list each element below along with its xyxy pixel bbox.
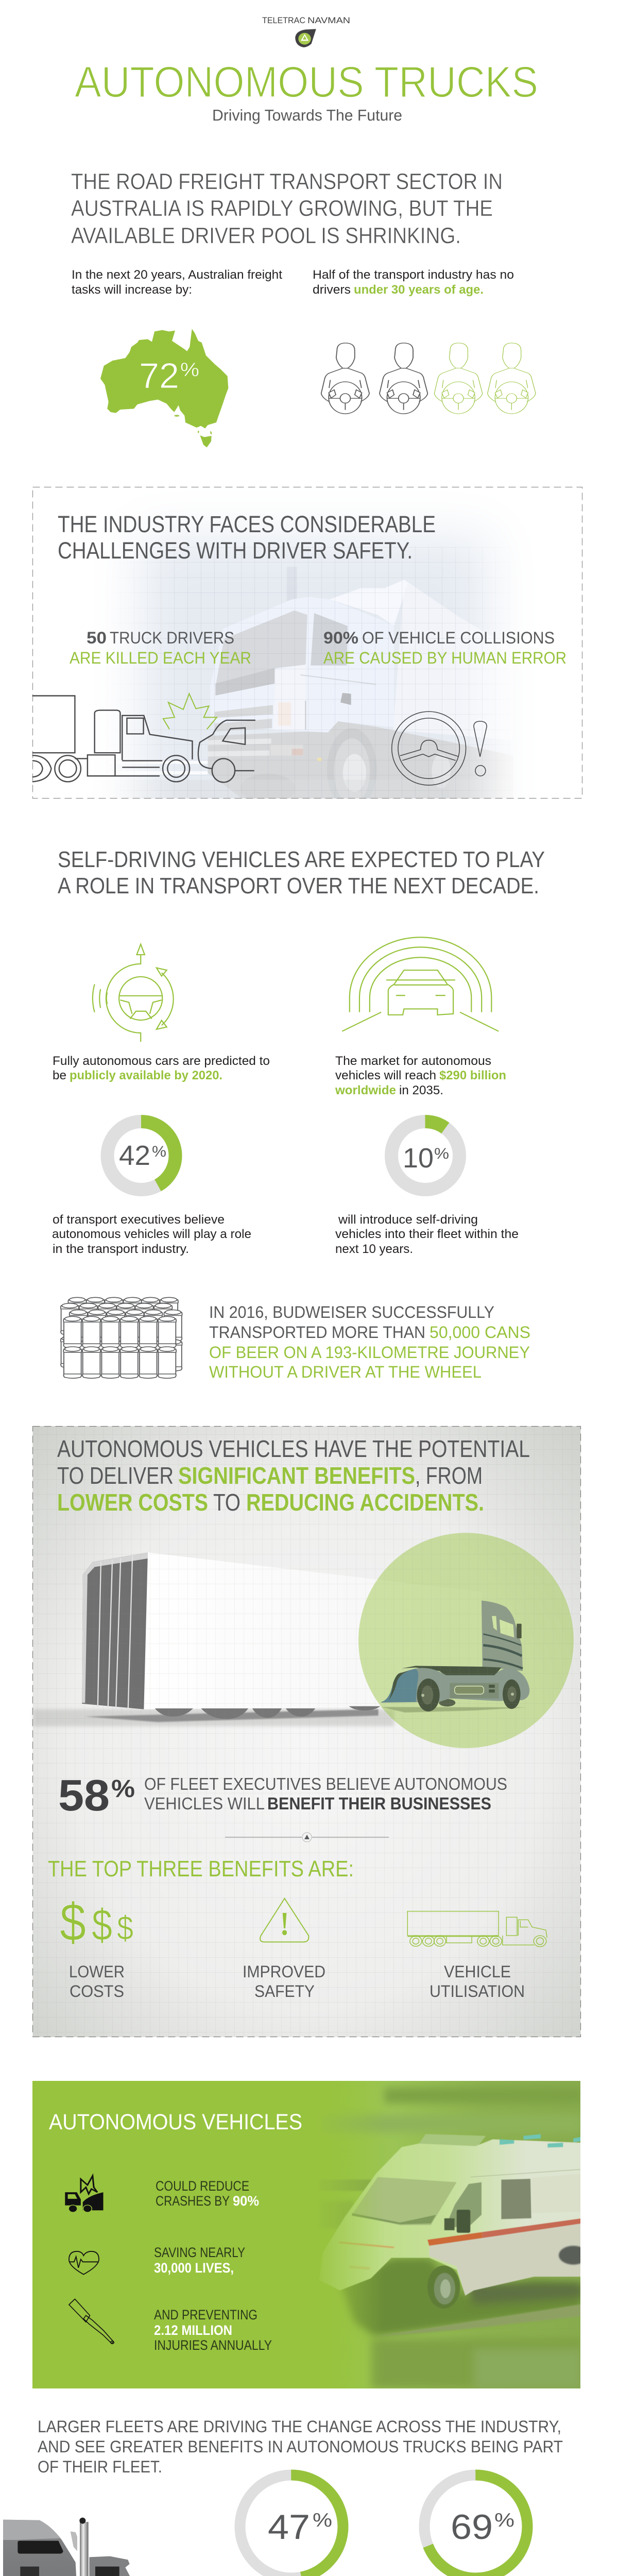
text: 10% description: will introduce self-driving [338, 1213, 478, 1227]
text: publicly available by 2020: publicly available by 2020. [70, 1069, 222, 1082]
text: publicly available by 2020: be [53, 1069, 66, 1082]
donut chart: 42% [107, 1122, 175, 1190]
heading: road freight sector: AVAILABLE DRIVER POOL IS SHRINKING. [71, 223, 461, 248]
heading: TO DELIVER [57, 1462, 174, 1489]
panel background [33, 1426, 581, 2037]
heading: , FROM [415, 1462, 483, 1489]
text: Budweiser callout: 50,000 CANS [430, 1323, 530, 1342]
text: $290 billion market [335, 1054, 506, 1097]
text: freight task growth [72, 268, 282, 297]
icon: dollar signs: $ [117, 1909, 133, 1947]
label: improved safety: IMPROVED [243, 1962, 325, 1981]
heading: AUTONOMOUS VEHICLES HAVE THE POTENTIAL [57, 1435, 530, 1462]
heading: larger fleets: LARGER FLEETS ARE DRIVING THE CHANGE ACROSS THE INDUSTRY, [38, 2417, 561, 2436]
stat: 58% of fleet executives [58, 1771, 507, 1820]
truck cab [381, 1601, 529, 1713]
subtitle: Driving Towards The Future [212, 106, 402, 124]
icon: truck outline [407, 1911, 547, 1947]
heading: THE INDUSTRY FACES CONSIDERABLE [58, 511, 436, 537]
icon: crash [65, 2176, 104, 2212]
donut chart: 10%: 10 [403, 1143, 434, 1174]
icon: dollar signs: $ [60, 1893, 86, 1953]
heading: road freight sector: THE ROAD FREIGHT TRANSPORT SECTOR IN [71, 169, 503, 194]
heading: self-driving vehicles [58, 847, 545, 899]
label: lower costs: COSTS [70, 1982, 124, 2001]
donut chart: 47%: 47 [268, 2507, 310, 2547]
text: reduce crashes [156, 2178, 259, 2209]
stat: 58% of fleet executives: 58 [58, 1771, 110, 1820]
stat: 50 truck drivers: 50 [87, 629, 107, 647]
icon: brand logo [295, 29, 316, 47]
heading: larger fleets: AND SEE GREATER BENEFITS IN AUTONOMOUS TRUCKS BEING PART [38, 2437, 563, 2456]
driver 1 [321, 343, 369, 414]
heading: LOWER COSTS [57, 1489, 208, 1516]
heading: top three benefits: THE TOP THREE BENEFITS ARE: [48, 1856, 354, 1882]
text: 10% description: next 10 years. [335, 1242, 413, 1256]
heading: road freight sector: AUSTRALIA IS RAPIDLY GROWING, BUT THE [71, 196, 493, 221]
image: autonomous truck with highlight circle [33, 1533, 574, 1748]
heading: self-driving vehicles: SELF-DRIVING VEHICLES ARE EXPECTED TO PLAY [58, 847, 545, 872]
text: Budweiser callout: OF BEER ON A 193-KILOMETRE JOURNEY [209, 1343, 530, 1362]
stat: 90% of collisions [323, 629, 566, 667]
photo: pale truck background [114, 526, 513, 799]
donut chart: 47%: % [313, 2510, 332, 2531]
stat: 50 truck drivers: TRUCK DRIVERS [110, 629, 234, 647]
heading: larger fleets [38, 2417, 563, 2476]
stat: 58% of fleet executives: % [111, 1775, 135, 1803]
stat: 58% of fleet executives: VEHICLES WILL [144, 1794, 265, 1813]
heading: REDUCING ACCIDENTS. [246, 1489, 484, 1516]
stat: 58% of fleet executives: BENEFIT THEIR BUSINESSES [267, 1794, 491, 1813]
brand header: wordmark [262, 15, 350, 25]
text: Budweiser callout [209, 1303, 530, 1381]
label: lower costs [69, 1962, 125, 2001]
stat: 50 truck drivers [70, 629, 251, 667]
text: 42% description: autonomous vehicles will play a role [52, 1227, 251, 1241]
panel grid overlay [33, 1426, 581, 2037]
icon: warning triangle [260, 1899, 308, 1942]
panel: driver safety [32, 487, 582, 810]
driver 2 [380, 343, 427, 414]
text: Budweiser callout: WITHOUT A DRIVER AT THE WHEEL [209, 1363, 482, 1381]
text: reduce crashes: COULD REDUCE [156, 2178, 249, 2194]
map of Australia with 72% [100, 329, 228, 447]
text: publicly available by 2020: Fully autonomous cars are predicted to [53, 1054, 270, 1068]
panel: significant benefits [33, 1426, 581, 2037]
text: reduce crashes: CRASHES BY [156, 2193, 230, 2209]
heading: self-driving vehicles: A ROLE IN TRANSPORT OVER THE NEXT DECADE. [58, 873, 539, 899]
heading: AUTONOMOUS VEHICLES [49, 2110, 302, 2134]
stat: 90% of collisions: 90% [323, 629, 358, 647]
title: AUTONOMOUS TRUCKS [75, 58, 538, 106]
heading: larger fleets: OF THEIR FLEET. [38, 2458, 162, 2476]
text: 10% description [335, 1213, 519, 1256]
donut chart: 69% [424, 2475, 527, 2576]
icon: autonomous steering wheel [93, 944, 174, 1042]
donut chart: 69%: % [494, 2510, 514, 2531]
image: silver truck [0, 2518, 199, 2576]
text: Budweiser callout: TRANSPORTED MORE THAN [209, 1323, 425, 1342]
stat: 90% of collisions: OF VEHICLE COLLISIONS [362, 629, 555, 647]
icon: stacked beer cans [61, 1297, 182, 1378]
text: saving lives: SAVING NEARLY [154, 2245, 245, 2260]
text: $290 billion market: in 2035. [399, 1083, 443, 1097]
text: saving lives [154, 2245, 245, 2276]
heading [58, 511, 436, 564]
dashed panel border [33, 487, 582, 799]
heading: CHALLENGES WITH DRIVER SAFETY. [58, 537, 413, 564]
stat: 50 truck drivers: ARE KILLED EACH YEAR [70, 649, 251, 667]
icon: crutch [69, 2299, 114, 2344]
text: freight task growth: In the next 20 years, Australian freight [72, 268, 282, 282]
text: preventing injuries [154, 2307, 272, 2353]
brand header: wordmark: NAVMAN [307, 15, 350, 25]
text: preventing injuries: 2.12 MILLION [154, 2323, 232, 2338]
photo: blurred ambulance [32, 2081, 588, 2388]
text: half of the industry: under 30 years of age. [354, 283, 484, 297]
donut chart: 42%: % [152, 1143, 166, 1160]
heading: road freight sector [71, 169, 503, 248]
driver 3 [434, 343, 483, 414]
text: half of the industry: Half of the transport industry has no [313, 268, 514, 282]
icon: truck and car crash [32, 693, 255, 782]
text: 42% description [52, 1213, 251, 1256]
heading: SIGNIFICANT BENEFITS [178, 1462, 415, 1489]
text: Budweiser callout: IN 2016, BUDWEISER SUCCESSFULLY [209, 1303, 494, 1321]
label: improved safety: SAFETY [254, 1982, 315, 2001]
text: $290 billion market: vehicles will reach [335, 1069, 436, 1082]
donut chart: 47% [240, 2475, 343, 2576]
icon: heart with pulse [69, 2251, 99, 2275]
text: preventing injuries: AND PREVENTING [154, 2307, 258, 2323]
heading [57, 1435, 530, 1516]
panel border [33, 1426, 581, 2037]
icon: dollar signs [60, 1893, 133, 1953]
label: vehicle utilisation: VEHICLE [444, 1962, 511, 1981]
divider with logo [225, 1833, 389, 1842]
text: $290 billion market: The market for autonomous [335, 1054, 491, 1068]
text: half of the industry [313, 268, 514, 297]
label: lower costs: LOWER [69, 1962, 125, 1981]
panel: autonomous vehicles ambulance [32, 2081, 588, 2388]
icon: steering wheel with exclamation mark [392, 711, 487, 785]
donut chart: 42%: 42 [119, 1140, 150, 1171]
text: $290 billion market: worldwide [335, 1083, 396, 1097]
text: 42% description: in the transport industry. [53, 1242, 189, 1256]
donut chart: 10%: % [434, 1145, 449, 1162]
text: 42% description: of transport executives believe [53, 1213, 225, 1227]
text: $290 billion market: $290 billion [439, 1069, 506, 1082]
text: freight task growth: tasks will increase by: [72, 283, 192, 297]
heading: TO [213, 1489, 241, 1516]
text: half of the industry: drivers [313, 283, 351, 297]
label: vehicle utilisation: UTILISATION [430, 1982, 525, 2001]
icon: four drivers [321, 343, 536, 414]
map of Australia with 72%: % [180, 359, 199, 381]
text: saving lives: 30,000 LIVES, [154, 2260, 234, 2276]
driver 4 [488, 343, 536, 414]
text: 10% description: vehicles into their fleet within the [335, 1227, 519, 1241]
map of Australia with 72%: 72 [139, 355, 179, 396]
stat: 58% of fleet executives: OF FLEET EXECUTIVES BELIEVE AUTONOMOUS [144, 1774, 507, 1793]
stat: 90% of collisions: ARE CAUSED BY HUMAN ERROR [323, 649, 566, 667]
text: reduce crashes: 90% [233, 2193, 259, 2209]
icon: car in tunnel [342, 937, 499, 1031]
text: preventing injuries: INJURIES ANNUALLY [154, 2337, 272, 2353]
brand header: wordmark: TELETRAC [262, 15, 305, 25]
donut chart: 10% [391, 1122, 459, 1190]
text: publicly available by 2020 [53, 1054, 270, 1082]
donut chart: 69%: 69 [451, 2507, 493, 2547]
label: vehicle utilisation [430, 1962, 525, 2001]
label: improved safety [243, 1962, 325, 2001]
icon: dollar signs: $ [92, 1901, 112, 1950]
